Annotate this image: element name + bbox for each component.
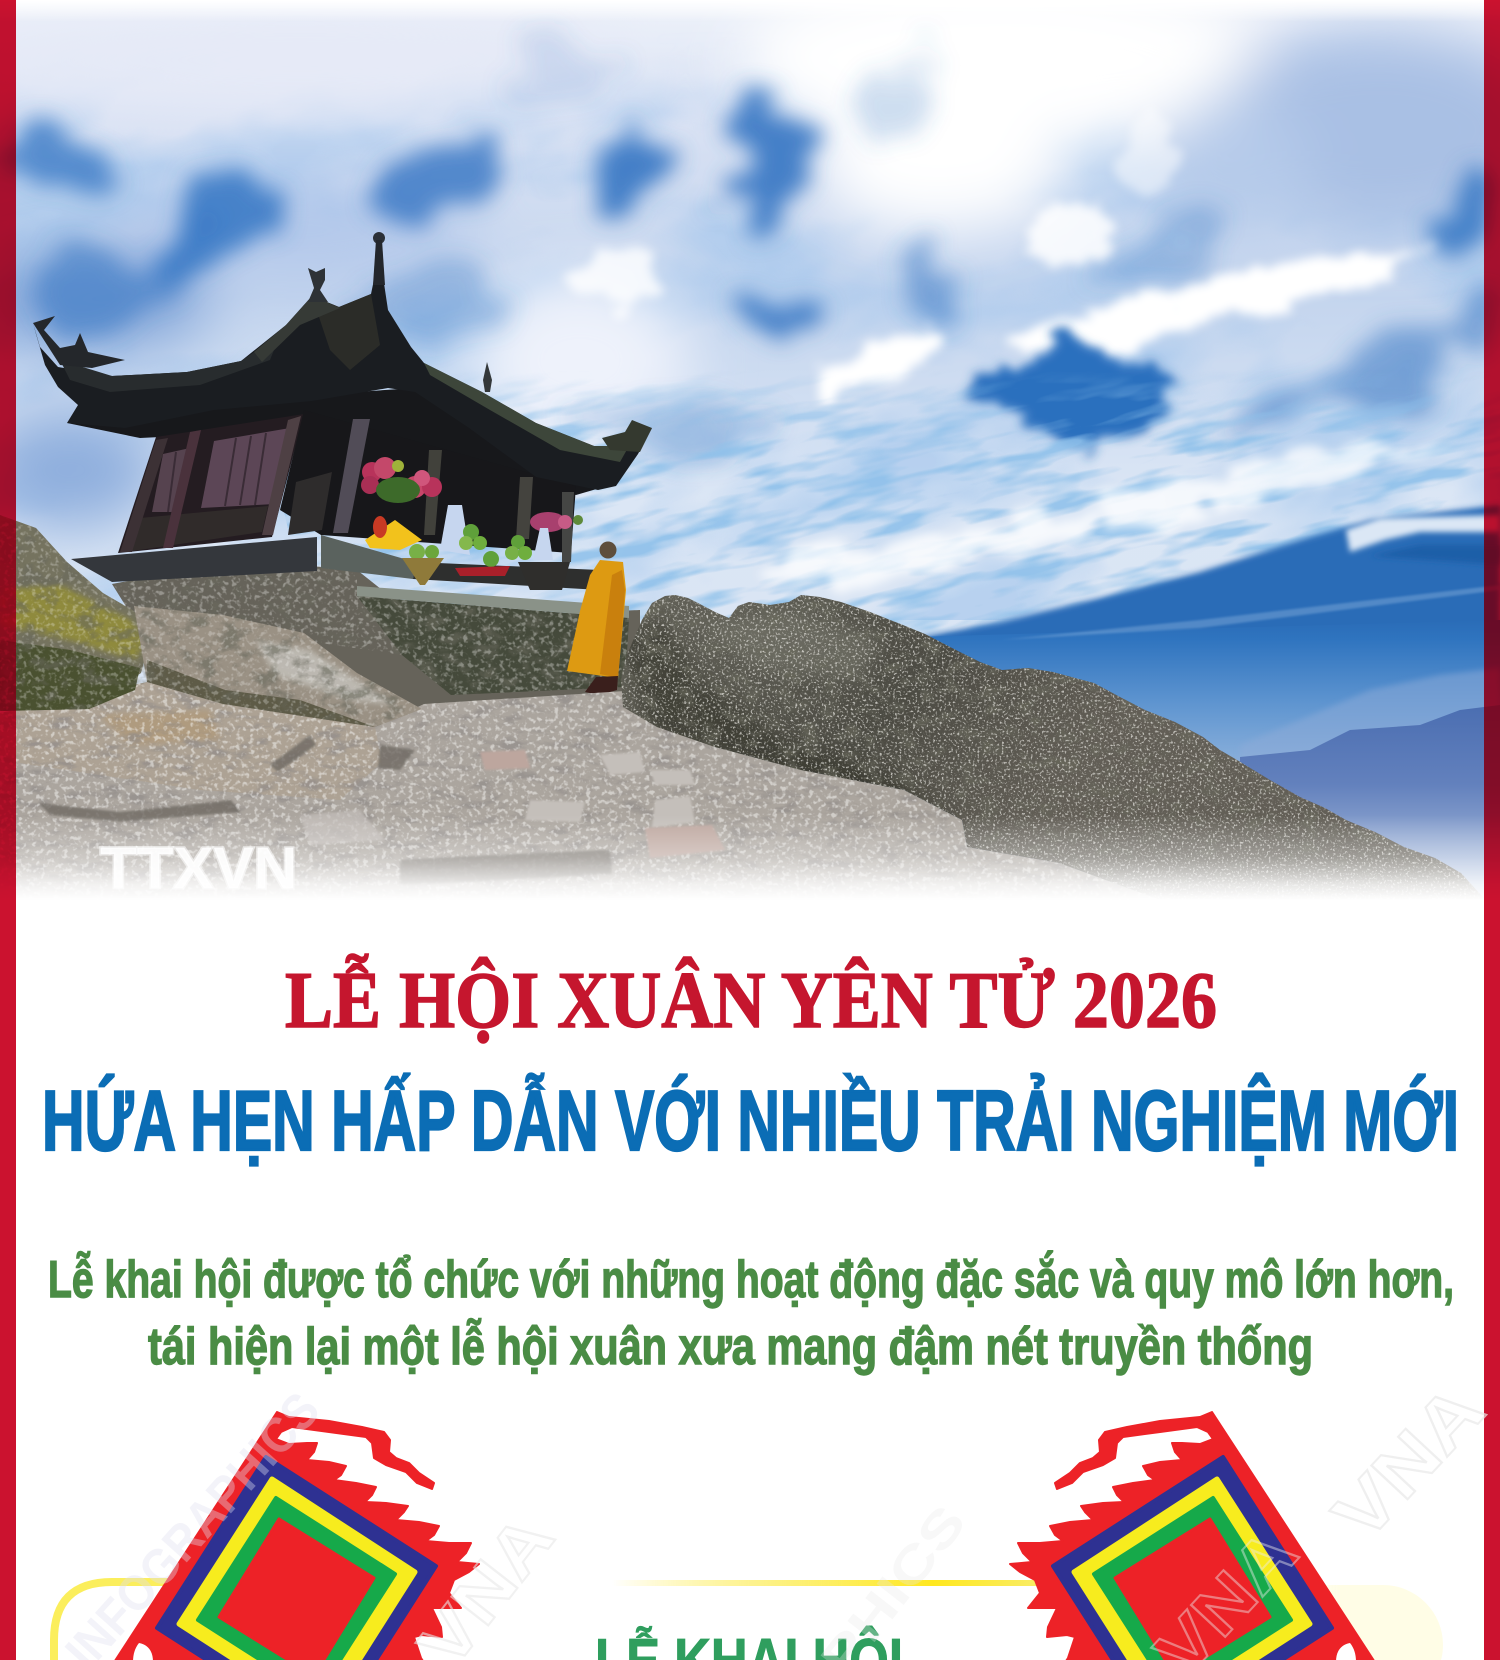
flowers and offerings (361, 457, 583, 590)
dark blue cloud gap (970, 340, 1190, 457)
photo: Yen Tu pagoda on the mountain top (0, 6, 1500, 895)
watermarks: infographics VNA (55, 1370, 1499, 1660)
left mossy boulder and pale rock (0, 515, 422, 727)
TTXVN watermark: TTXVN (100, 836, 297, 901)
deep blue horizon sky (921, 502, 1500, 636)
rock and wall texture (115, 566, 629, 695)
roof finials (373, 232, 385, 244)
altar stone wall (357, 596, 629, 695)
temple (33, 232, 652, 590)
sky background (0, 10, 1500, 713)
platform (71, 537, 317, 582)
left rock texture (0, 510, 430, 730)
top white fade (0, 0, 1500, 22)
icon: left five-colour festival flag (109, 1412, 479, 1660)
roof (33, 270, 652, 490)
distant mountains (1240, 668, 1500, 860)
watermarks: infographics VNA: VNA (1318, 1370, 1499, 1556)
mottled lower clouds (284, 378, 1500, 634)
stone path and slabs (0, 680, 1200, 910)
wall and interior (118, 414, 304, 553)
intro text (48, 1250, 1454, 1376)
altar ledge (357, 586, 629, 618)
broad sky tones (0, 0, 1500, 530)
big speckled boulder (600, 580, 1500, 910)
roof underside fill (67, 388, 600, 495)
haze below horizon (882, 620, 1500, 841)
icon: right five-colour festival flag (1010, 1412, 1380, 1660)
columns (333, 419, 370, 533)
monk (567, 542, 626, 695)
blue sky patches (5, 50, 1500, 446)
backing rock behind temple and wall (112, 560, 640, 730)
panel: opening ceremony box (54, 1580, 1443, 1660)
white cloud streaks (575, 110, 1440, 410)
bottom white fade (0, 815, 1500, 901)
cloud mottling (0, 80, 1500, 620)
title: festival name: LỄ HỘI XUÂN YÊN TỬ 2026 (285, 954, 1217, 1045)
